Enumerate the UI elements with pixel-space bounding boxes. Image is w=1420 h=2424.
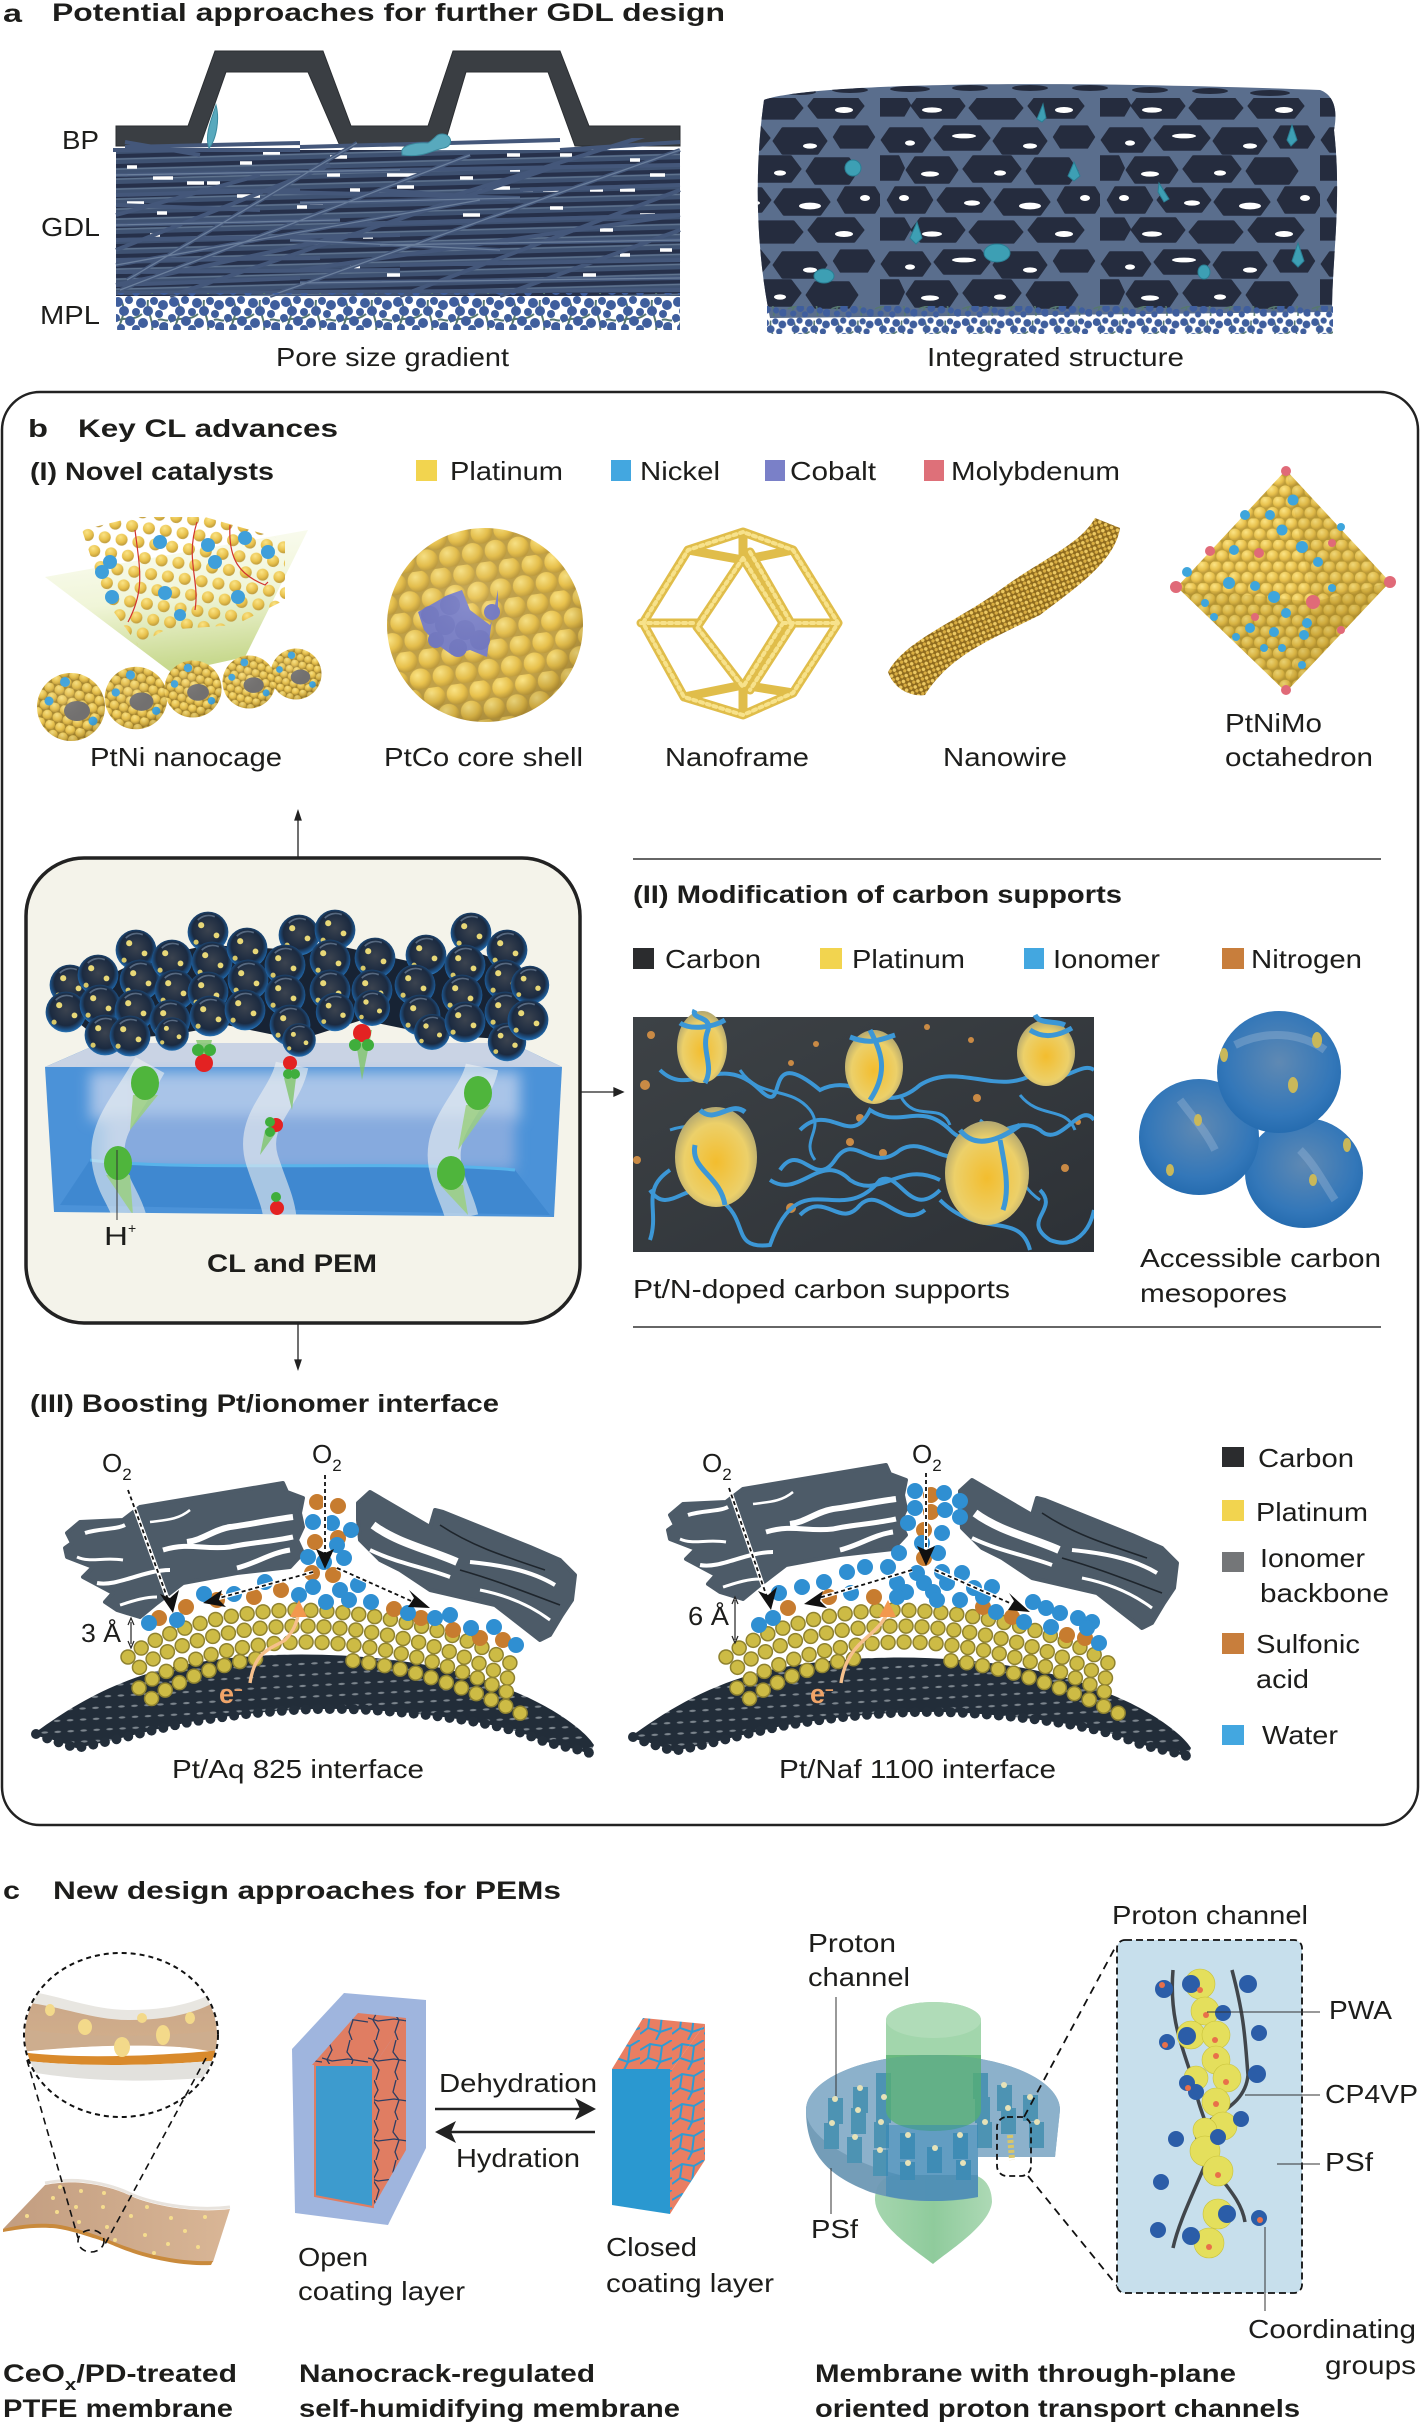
- membrane block: [40, 1040, 570, 1220]
- arrow: dehydration: [435, 2098, 596, 2120]
- caption: CeOx/PD-treated PTFE membrane: CeO: [3, 2360, 54, 2388]
- labels O2: O: [702, 1448, 722, 1478]
- label PWA: PWA: [1329, 1995, 1393, 2025]
- label leader lines: [831, 1997, 1320, 2311]
- label CP4VP: CP4VP: [1325, 2079, 1418, 2109]
- labels O2: [702, 1439, 942, 1484]
- labels O2: O: [912, 1439, 932, 1469]
- legend: carbon supports: Carbon: [665, 944, 761, 974]
- diagram: Pt/Aq 825 interface: [36, 1439, 594, 1784]
- label coordinating groups: [1248, 2314, 1416, 2380]
- open coating block: [292, 1993, 426, 2225]
- green cylinder within disc: [886, 2055, 981, 2131]
- label closed coating layer: [606, 2232, 774, 2298]
- sub-panel I: novel catalysts: [30, 456, 1396, 772]
- label PSf (disc): PSf: [811, 2214, 859, 2244]
- caption: PtNi nanocage: PtNi nanocage: [90, 742, 282, 772]
- caption: PtNiMo octahedron: octahedron: [1225, 742, 1373, 772]
- caption: nanocrack-regulated membrane: Nanocrack-regulated: [299, 2360, 595, 2388]
- gap label 6 angstrom: [688, 1597, 738, 1643]
- heading: key CL advances: Key CL advances: [78, 415, 338, 443]
- reaction molecules: [192, 1024, 374, 1215]
- label closed coating layer: coating layer: [606, 2268, 774, 2298]
- membrane sheet: [3, 2180, 230, 2265]
- caption: CeOx/PD-treated PTFE membrane: x: [65, 2375, 77, 2394]
- legend: interface: backbone: [1260, 1578, 1389, 1608]
- legend: interface: Water: [1262, 1720, 1338, 1750]
- caption: CeOx/PD-treated PTFE membrane: /PD-treated: [76, 2360, 237, 2388]
- illustration: PtCo core shell: [387, 528, 583, 722]
- label MPL: MPL: [40, 300, 100, 330]
- caption: PtNiMo octahedron: [1225, 708, 1373, 772]
- caption: accessible carbon mesopores: Accessible carbon: [1140, 1243, 1381, 1273]
- legend: catalysts: [416, 456, 1120, 486]
- zoom guide lines: [27, 2058, 206, 2252]
- heading II: (II) Modification of carbon supports: [633, 881, 1122, 909]
- label dehydration: Dehydration: [439, 2068, 597, 2098]
- panel b: key CL advances: [2, 392, 1418, 1825]
- carbon mesh: [36, 1655, 594, 1754]
- water and sulfonic acid: [751, 1483, 1107, 1651]
- closed coating block: [612, 2018, 705, 2214]
- label CL and PEM: CL and PEM: [207, 1250, 377, 1278]
- caption: nanoframe: Nanoframe: [665, 742, 809, 772]
- caption: integrated structure: Integrated structure: [927, 342, 1184, 372]
- magnifier circle: [24, 1953, 218, 2117]
- arrow right to carbon supports: [580, 1088, 623, 1096]
- legend: carbon supports: Ionomer: [1053, 944, 1160, 974]
- caption: nanocrack-regulated membrane: self-humidifying membrane: [299, 2395, 680, 2423]
- electron path: −: [234, 1682, 243, 1699]
- caption: through-plane membrane: Membrane with through-plane: [815, 2360, 1236, 2388]
- neck through disc: [886, 2125, 978, 2201]
- labels O2: O: [312, 1439, 332, 1469]
- heading I: (I) Novel catalysts: [30, 458, 274, 486]
- proton channel detail panel: [1117, 1940, 1302, 2293]
- proton channel array: [824, 2073, 1044, 2180]
- label proton channel (disc): channel: [808, 1962, 910, 1992]
- bipolar plate: [116, 51, 680, 146]
- legend: catalysts: Cobalt: [790, 456, 877, 486]
- carbon mesh: [633, 1658, 1191, 1757]
- legend: carbon supports: Nitrogen: [1251, 944, 1362, 974]
- oxygen pathway arrows: [729, 1473, 1030, 1612]
- illustration: nanoframe: [641, 532, 838, 715]
- gap label 6 angstrom: 6 Å: [688, 1601, 730, 1631]
- legend: interface: acid: [1256, 1664, 1309, 1694]
- dashed channel marker: [997, 2117, 1031, 2176]
- electron path: [219, 1600, 307, 1709]
- polymer strands: [1172, 1970, 1248, 2248]
- caption: PtNiMo octahedron: PtNiMo: [1225, 708, 1322, 738]
- labels O2: 2: [932, 1456, 942, 1475]
- label H+: H: [104, 1221, 128, 1251]
- label H+: [104, 1150, 136, 1251]
- caption: through-plane membrane: oriented proton transport channels: [815, 2395, 1300, 2423]
- sub-panel III: Pt/ionomer interface: [30, 1390, 1389, 1784]
- porous body: [750, 78, 1345, 328]
- sub-panel II: carbon supports: [633, 881, 1381, 1308]
- diagram: Pt/Naf 1100 interface: [633, 1439, 1191, 1784]
- gap label 3 angstrom: 3 Å: [81, 1618, 122, 1648]
- arrow down to interface: [295, 1323, 301, 1369]
- electron path: e: [810, 1679, 825, 1709]
- zoom guide lines: [1024, 1946, 1119, 2288]
- PWA clusters: [1177, 1969, 1241, 2258]
- MPL particles: [116, 293, 680, 330]
- label open coating layer: coating layer: [298, 2276, 465, 2306]
- arrow: hydration: [435, 2121, 595, 2143]
- rule above section II: [633, 858, 1381, 860]
- caption: pore size gradient: Pore size gradient: [276, 342, 510, 372]
- panel c: PEM design approaches: [3, 1877, 1418, 2423]
- platinum atoms: [726, 1610, 1120, 1714]
- label PSf (detail): PSf: [1325, 2147, 1374, 2177]
- channel dots: [829, 2082, 1040, 2166]
- label coordinating groups: Coordinating: [1248, 2314, 1416, 2344]
- labels O2: O: [102, 1448, 122, 1478]
- legend: carbon supports: Platinum: [852, 944, 965, 974]
- label closed coating layer: Closed: [606, 2232, 697, 2262]
- arrow up to catalysts: [295, 811, 301, 858]
- labels O2: 2: [722, 1465, 732, 1484]
- platinum atoms: [128, 1610, 522, 1714]
- magnified membrane cross-section: [25, 1993, 217, 2080]
- water droplets: [814, 104, 1304, 283]
- integrated MPL particles: [767, 306, 1333, 334]
- electron path: −: [825, 1682, 834, 1699]
- illustration: Pt/N-doped carbon supports: [633, 1010, 1094, 1252]
- green cylinder upper: [886, 2002, 981, 2110]
- panel letter b: b: [28, 415, 48, 443]
- diagram: integrated structure: [750, 78, 1345, 334]
- oxygen pathway arrows: [128, 1475, 430, 1613]
- legend: interface: Platinum: [1256, 1497, 1368, 1527]
- legend: interface: Ionomer: [1260, 1543, 1365, 1573]
- caption: Pt/N-doped carbon supports: Pt/N-doped carbon supports: [633, 1274, 1010, 1304]
- labels O2: 2: [332, 1456, 342, 1475]
- legend: catalysts: Platinum: [450, 456, 563, 486]
- panel letter c: c: [3, 1877, 20, 1905]
- labels O2: 2: [122, 1465, 132, 1484]
- green proton spheres: [104, 1066, 492, 1190]
- legend: interface: Sulfonic: [1256, 1629, 1360, 1659]
- caption: nanocrack-regulated membrane: [299, 2360, 680, 2423]
- panel a: GDL design: [3, 0, 1345, 372]
- illustration: PtNiMo octahedron: [1170, 466, 1396, 695]
- caption: CeOx/PD-treated PTFE membrane: [3, 2360, 237, 2423]
- rule below section II: [633, 1326, 1381, 1328]
- water droplets: [207, 105, 451, 156]
- caption: Pt/Aq 825 interface: Pt/Aq 825 interface: [172, 1754, 424, 1784]
- caption: Pt/Naf 1100 interface: Pt/Naf 1100 interface: [779, 1754, 1056, 1784]
- label BP: BP: [62, 125, 99, 155]
- coordinating groups: [1150, 1975, 1267, 2245]
- fibres: [113, 125, 680, 296]
- illustration: accessible carbon mesopores: [1139, 1011, 1363, 1228]
- label hydration: Hydration: [456, 2143, 580, 2173]
- caption: PtCo core shell: PtCo core shell: [384, 742, 583, 772]
- legend: interface: Carbon: [1258, 1443, 1354, 1473]
- illustration: nanocrack-regulated membrane: [292, 1993, 774, 2306]
- panel background: [26, 858, 580, 1323]
- green cone: [875, 2175, 992, 2264]
- caption: through-plane membrane: [815, 2360, 1300, 2423]
- label open coating layer: [298, 2242, 465, 2306]
- legend: carbon supports: [633, 944, 1362, 974]
- label proton channel (disc): Proton: [808, 1928, 896, 1958]
- heading: PEM approaches: New design approaches for PEMs: [53, 1877, 561, 1905]
- central panel: CL and PEM: [26, 858, 580, 1323]
- labels O2: [102, 1439, 342, 1484]
- frame: [2, 392, 1418, 1825]
- illustration: through-plane membrane: [806, 1900, 1418, 2380]
- electron path: e: [219, 1679, 234, 1709]
- water and sulfonic acid: [141, 1494, 524, 1653]
- panel letter a: a: [3, 0, 23, 28]
- legend: catalysts: Molybdenum: [951, 456, 1120, 486]
- catalyst agglomerate: [46, 910, 549, 1061]
- legend: catalysts: Nickel: [640, 456, 720, 486]
- illustration: nanowire: [888, 518, 1120, 695]
- illustration: CeOx/PD-treated PTFE membrane: [3, 1953, 230, 2265]
- caption: accessible carbon mesopores: mesopores: [1140, 1278, 1287, 1308]
- label open coating layer: Open: [298, 2242, 368, 2272]
- caption: nanowire: Nanowire: [943, 742, 1067, 772]
- ionomer backbone: [668, 1465, 1177, 1628]
- ionomer backbone: [65, 1483, 575, 1640]
- heading III: (III) Boosting Pt/ionomer interface: [30, 1390, 499, 1418]
- label proton channel (detail): Proton channel: [1112, 1900, 1308, 1930]
- caption: accessible carbon mesopores: [1140, 1243, 1381, 1308]
- illustration: PtNi nanocage: [37, 515, 322, 741]
- legend: interface: [1222, 1443, 1389, 1750]
- caption: CeOx/PD-treated PTFE membrane: PTFE membrane: [3, 2395, 233, 2423]
- label GDL: GDL: [41, 212, 100, 242]
- label coordinating groups: groups: [1325, 2350, 1416, 2380]
- electron path: [810, 1600, 896, 1709]
- label proton channel (disc): [808, 1928, 910, 1992]
- membrane disc: [806, 2055, 1060, 2201]
- label H+: +: [128, 1220, 136, 1236]
- diagram: pore size gradient GDL: [113, 51, 680, 330]
